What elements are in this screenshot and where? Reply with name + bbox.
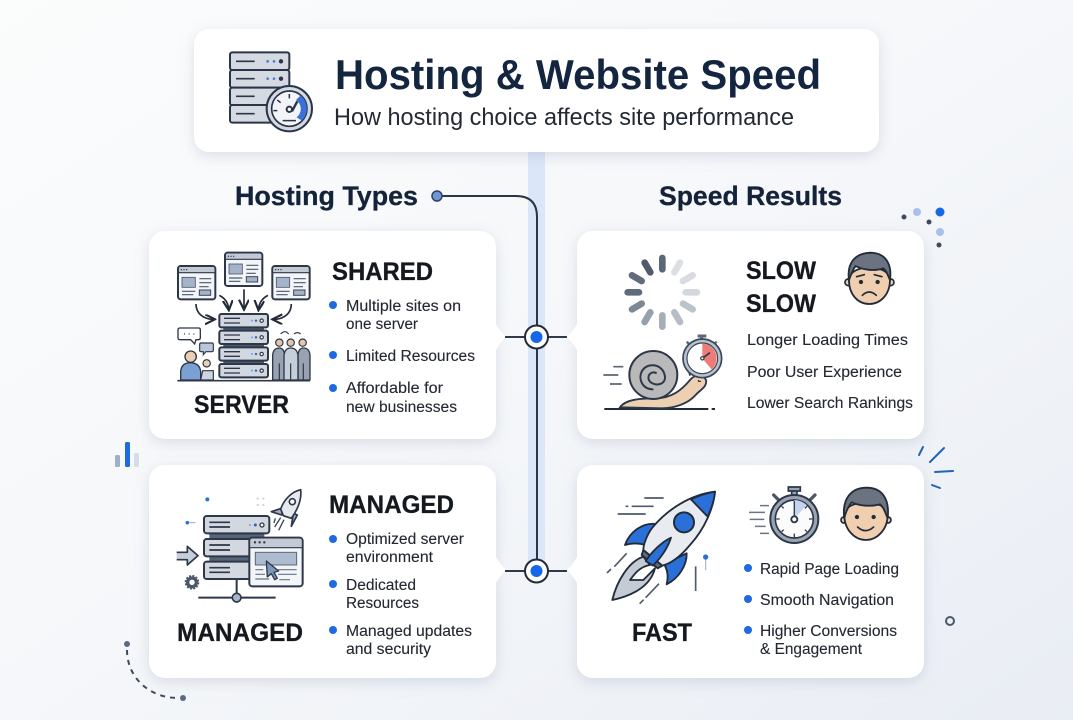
heading: slow: SLOW bbox=[746, 290, 816, 318]
bullet list: managed features: environment bbox=[346, 549, 434, 566]
heading: shared: SHARED bbox=[332, 258, 433, 286]
heading: speed results: Speed Results bbox=[659, 181, 842, 211]
decoration: small bar chart bbox=[115, 442, 139, 467]
bullet list: shared features bbox=[329, 298, 475, 416]
text list: slow effects: Longer Loading Times bbox=[747, 332, 908, 349]
label: server: SERVER bbox=[194, 391, 289, 419]
bullet list: shared features: Affordable for bbox=[346, 380, 443, 397]
panel: shared hosting bbox=[149, 231, 506, 439]
icon: happy face bbox=[841, 488, 891, 540]
connector node: upper bbox=[505, 326, 567, 348]
header panel bbox=[194, 29, 879, 152]
heading: slow bbox=[746, 257, 816, 318]
label: managed: MANAGED bbox=[177, 619, 303, 647]
title: Hosting & Website Speed bbox=[335, 51, 821, 98]
label: fast: FAST bbox=[632, 619, 692, 647]
connector node: lower bbox=[505, 560, 567, 582]
text list: slow effects: Lower Search Rankings bbox=[747, 395, 913, 412]
bullet list: fast benefits: Rapid Page Loading bbox=[760, 561, 899, 578]
panel: managed hosting bbox=[149, 465, 506, 678]
bullet list: fast benefits: Higher Conversions bbox=[760, 623, 897, 640]
bullet list: fast benefits: Smooth Navigation bbox=[760, 592, 894, 609]
icon: loading spinner bbox=[628, 258, 697, 327]
bullet list: fast benefits: & Engagement bbox=[760, 641, 863, 658]
bullet list: managed features: Optimized server bbox=[346, 531, 464, 548]
central connector spine bbox=[432, 150, 545, 570]
decoration: dots top right bbox=[902, 208, 944, 248]
bullet list: managed features: and security bbox=[346, 641, 431, 658]
heading: slow: SLOW bbox=[746, 257, 816, 285]
heading: hosting types: Hosting Types bbox=[235, 181, 418, 211]
subtitle: How hosting choice affects site performance bbox=[334, 104, 794, 131]
decoration: blue burst lines bbox=[919, 447, 953, 488]
icon: managed server illustration bbox=[177, 490, 303, 602]
bullet list: managed features: Managed updates bbox=[346, 623, 472, 640]
bullet list: shared features: one server bbox=[346, 316, 418, 333]
icon: sad face bbox=[845, 253, 894, 304]
text list: slow effects bbox=[747, 332, 913, 412]
icon: shared server illustration bbox=[177, 253, 310, 381]
icon: fast stopwatch bbox=[749, 487, 818, 543]
text list: slow effects: Poor User Experience bbox=[747, 364, 902, 381]
bullet list: shared features: Limited Resources bbox=[346, 348, 475, 365]
icon: snail with stopwatch bbox=[603, 336, 722, 409]
bullet list: managed features: Resources bbox=[346, 595, 419, 612]
decoration: small ring bbox=[946, 617, 954, 625]
panel: slow results bbox=[567, 231, 924, 439]
bullet list: managed features: Dedicated bbox=[346, 577, 416, 594]
decoration: dashed arc bbox=[124, 641, 186, 701]
icon: rocket bbox=[607, 492, 715, 604]
panel: fast results bbox=[567, 465, 924, 678]
bullet list: fast benefits bbox=[744, 561, 899, 658]
bullet list: shared features: Multiple sites on bbox=[346, 298, 461, 315]
icon: server with speed gauge bbox=[230, 52, 312, 131]
bullet list: shared features: new businesses bbox=[346, 399, 457, 416]
heading: managed: MANAGED bbox=[329, 491, 454, 519]
bullet list: managed features bbox=[329, 531, 472, 658]
